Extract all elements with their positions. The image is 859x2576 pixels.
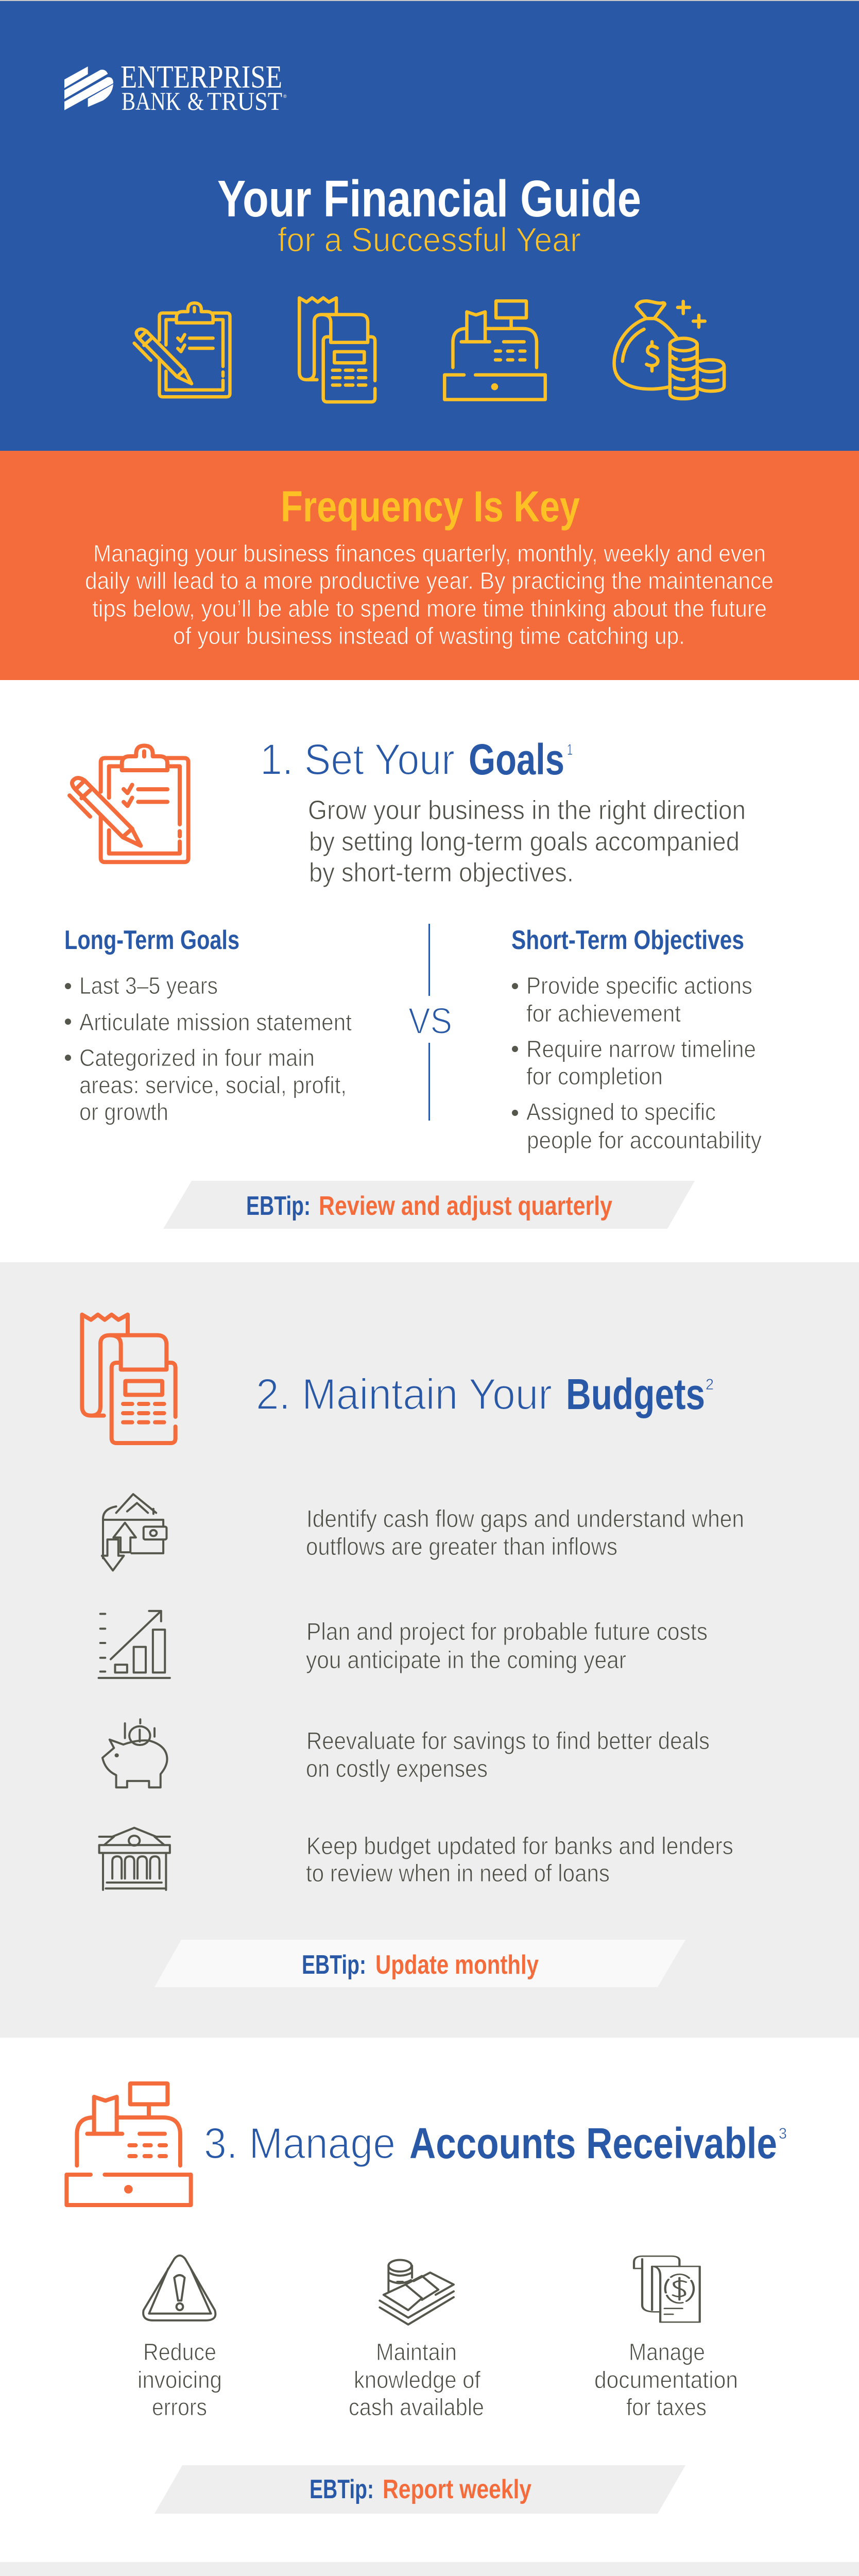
logo: Enterprise Bank & Trust white: TRUST <box>207 87 282 115</box>
callout: ebtip quarterly: Review and adjust quarterly <box>319 1191 612 1221</box>
subtitle: for a Successful Year <box>278 221 581 259</box>
icon: receipt terminal <box>299 298 375 402</box>
versus divider: VS <box>408 1001 452 1042</box>
callout: ebtip monthly: Update monthly <box>375 1950 539 1980</box>
text: keep budget updated: to review when in need of loans <box>306 1859 610 1887</box>
column: short-term objectives <box>511 925 762 1154</box>
logo: Enterprise Bank & Trust white: BANK <box>122 87 181 115</box>
icon: coins and cash <box>380 2260 454 2325</box>
column: long-term goals: Last 3–5 years <box>79 972 218 999</box>
text: reduce invoicing errors <box>138 2338 222 2420</box>
text: maintain knowledge of cash available <box>349 2338 484 2420</box>
icon: warning triangle <box>143 2256 215 2320</box>
text: manage documentation for taxes: Manage <box>629 2338 705 2365</box>
text: reduce invoicing errors: invoicing <box>138 2366 222 2393</box>
callout: ebtip monthly <box>154 1940 685 1987</box>
text: cash flow gaps: outflows are greater than inflows <box>306 1533 617 1560</box>
versus divider <box>408 924 452 1121</box>
text: goals description: by short-term objectives. <box>309 858 574 888</box>
text: cash flow gaps: Identify cash flow gaps and understand when <box>306 1505 744 1532</box>
text: plan future costs: you anticipate in the coming year <box>306 1646 626 1673</box>
text: maintain knowledge of cash available: knowledge of <box>354 2366 480 2393</box>
column: short-term objectives: Provide specific actions <box>526 972 752 999</box>
heading: set your goals: Goals <box>469 735 564 784</box>
panel: section 3 manage accounts receivable <box>0 2038 859 2562</box>
column: short-term objectives: Short-Term Objectives <box>511 925 744 955</box>
text: goals description <box>308 795 746 888</box>
heading: set your goals: 1 <box>567 741 573 758</box>
text: manage documentation for taxes <box>594 2338 738 2420</box>
icon: cash register <box>444 301 545 399</box>
column: long-term goals <box>64 925 352 1125</box>
heading: set your goals <box>260 735 573 784</box>
column: long-term goals: or growth <box>79 1098 168 1125</box>
icon: receipt terminal orange <box>82 1315 176 1443</box>
icon: wallet cash flow <box>102 1494 166 1570</box>
text: goals description: by setting long-term goals accompanied <box>309 827 740 857</box>
column: long-term goals: Long-Term Goals <box>64 925 239 955</box>
panel: header <box>0 0 859 451</box>
callout: ebtip monthly: EBTip: <box>302 1950 366 1980</box>
column: short-term objectives: for completion <box>526 1063 663 1090</box>
column: long-term goals: Categorized in four main <box>79 1044 315 1071</box>
icon: clipboard <box>134 303 230 397</box>
icon: tax document <box>634 2256 700 2322</box>
text: intro paragraph: tips below, you’ll be able to spend more time thinking about the future <box>92 595 767 622</box>
logo: Enterprise Bank & Trust white: ENTERPRISE <box>121 60 282 95</box>
callout: ebtip weekly <box>154 2465 685 2514</box>
text: intro paragraph: daily will lead to a more productive year. By practicing the maintenance <box>85 567 774 594</box>
text: keep budget updated: Keep budget updated for banks and lenders <box>306 1832 733 1859</box>
text: keep budget updated <box>306 1832 733 1887</box>
callout: ebtip weekly: Report weekly <box>383 2475 531 2504</box>
title: Your Financial Guide <box>217 170 641 228</box>
text: maintain knowledge of cash available: Maintain <box>376 2338 457 2365</box>
text: manage documentation for taxes: for taxes <box>626 2394 707 2420</box>
text: reevaluate savings: on costly expenses <box>306 1755 488 1782</box>
logo: Enterprise Bank & Trust white: ® <box>283 94 287 99</box>
text: plan future costs: Plan and project for probable future costs <box>306 1618 708 1645</box>
column: short-term objectives: people for accountability <box>527 1127 762 1154</box>
text: intro paragraph: Managing your business finances quarterly, monthly, weekly and even <box>93 540 766 567</box>
icon: clipboard orange <box>70 745 188 862</box>
logo: Enterprise Bank & Trust white: & <box>187 87 204 115</box>
column: short-term objectives: Require narrow timeline <box>526 1036 756 1062</box>
text: reduce invoicing errors: Reduce <box>143 2338 216 2365</box>
text: maintain knowledge of cash available: cash available <box>349 2394 484 2420</box>
text: reevaluate savings: Reevaluate for savings to find better deals <box>306 1727 710 1754</box>
icon: piggy bank <box>102 1719 167 1787</box>
text: reduce invoicing errors: errors <box>152 2394 207 2420</box>
column: short-term objectives: for achievement <box>526 1000 681 1027</box>
callout: ebtip weekly: EBTip: <box>310 2475 374 2504</box>
text: plan future costs <box>306 1618 708 1673</box>
heading: frequency is key: Frequency Is Key <box>281 482 580 531</box>
text: intro paragraph: of your business instead of wasting time catching up. <box>173 622 685 649</box>
heading: manage accounts receivable: 3 <box>779 2125 787 2142</box>
callout: ebtip quarterly: EBTip: <box>246 1191 311 1221</box>
heading: manage accounts receivable <box>204 2119 787 2167</box>
column: long-term goals: areas: service, social, profit, <box>79 1072 347 1098</box>
icon: bank building <box>99 1828 170 1890</box>
heading: set your goals: 1. Set Your <box>260 735 455 784</box>
panel: section 4 review cash position <box>0 2562 859 2576</box>
text: manage documentation for taxes: documentation <box>594 2366 738 2393</box>
icon: cash register orange <box>66 2083 191 2205</box>
text: goals description: Grow your business in the right direction <box>308 795 746 825</box>
column: long-term goals: Articulate mission statement <box>79 1009 352 1036</box>
logo: Enterprise Bank & Trust white <box>64 60 287 115</box>
heading: manage accounts receivable: 3. Manage <box>204 2119 396 2167</box>
heading: maintain your budgets: 2 <box>706 1376 714 1393</box>
icon: money bag <box>614 301 724 399</box>
column: short-term objectives: Assigned to specific <box>526 1098 716 1125</box>
icon: growth chart <box>99 1611 170 1678</box>
panel: section 1 set your goals <box>0 680 859 1262</box>
heading: maintain your budgets: 2. Maintain Your <box>256 1370 552 1418</box>
panel: frequency is key <box>0 451 859 680</box>
text: intro paragraph <box>85 540 774 649</box>
text: cash flow gaps <box>306 1505 744 1560</box>
panel: section 2 maintain your budgets <box>0 1262 859 2038</box>
callout: ebtip quarterly <box>163 1181 695 1229</box>
heading: maintain your budgets: Budgets <box>566 1370 705 1418</box>
heading: manage accounts receivable: Accounts Receivable <box>409 2119 777 2167</box>
text: reevaluate savings <box>306 1727 710 1782</box>
heading: maintain your budgets <box>256 1370 714 1418</box>
